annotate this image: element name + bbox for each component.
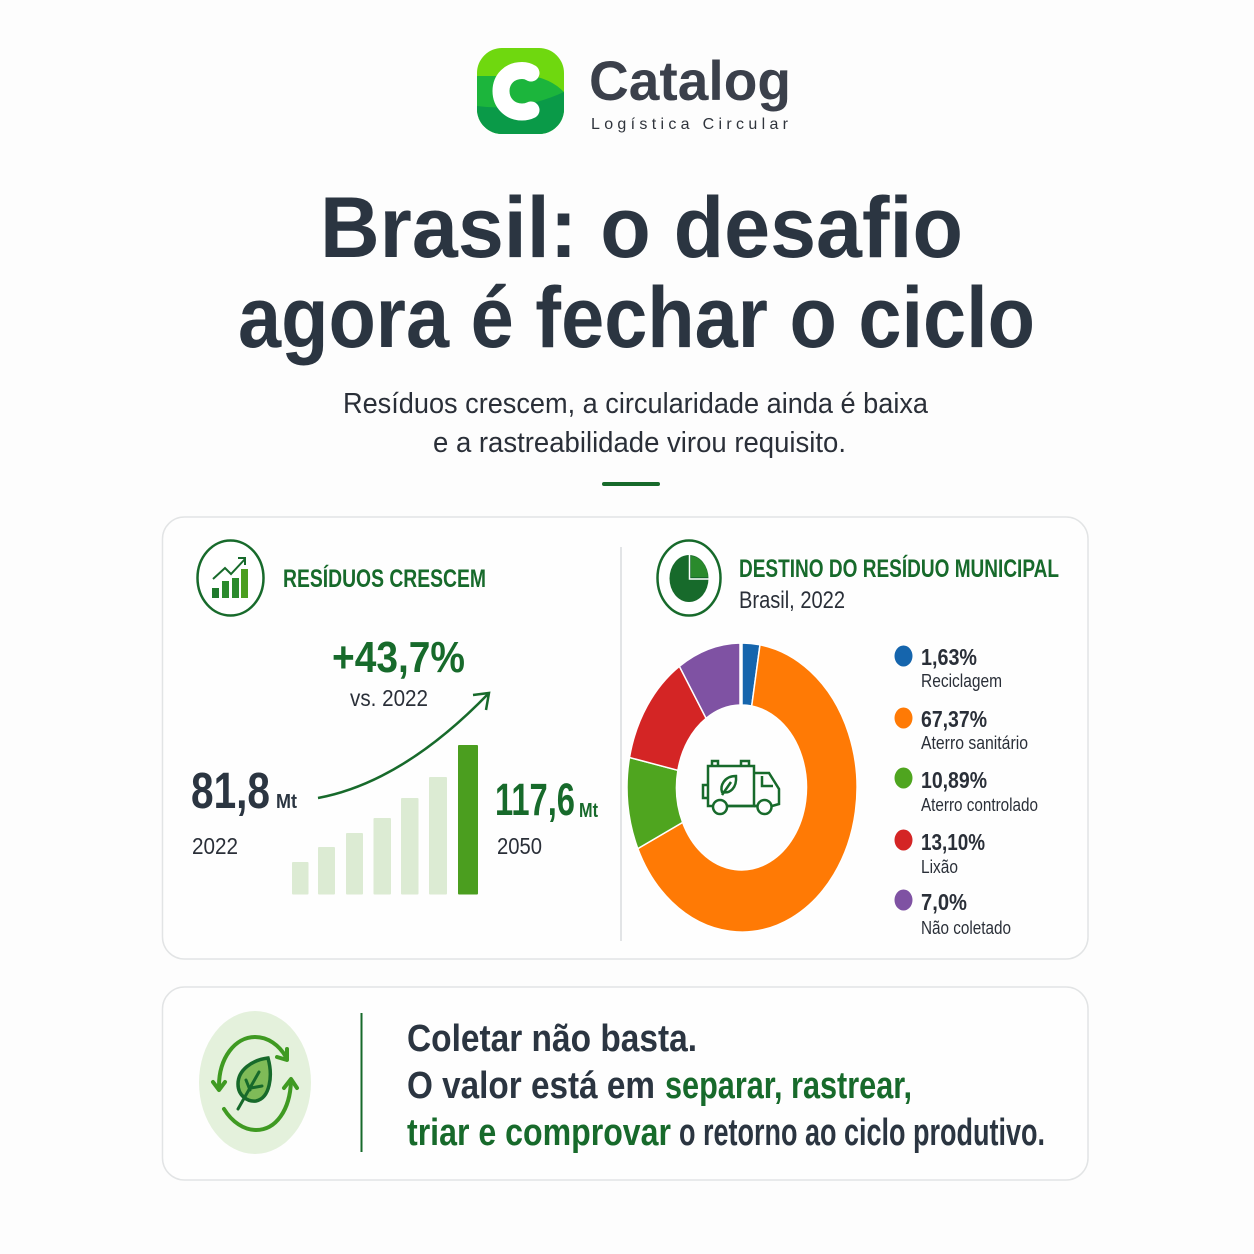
bar chart xyxy=(292,745,478,894)
legend item: nao coletado: 7,0% xyxy=(921,889,967,915)
stat: 2022 value: Mt xyxy=(276,791,297,813)
title xyxy=(238,180,1035,366)
stat: 2050 value: 2050 xyxy=(497,833,542,859)
legend item: lixao xyxy=(894,829,985,877)
conclusion text xyxy=(407,1018,1045,1154)
heading: destino: DESTINO DO RESÍDUO MUNICIPAL xyxy=(739,554,1059,583)
logo wordmark: Catalog xyxy=(589,49,791,112)
heading: destino: Brasil, 2022 xyxy=(739,587,845,614)
legend item: aterro sanitario xyxy=(894,706,1028,753)
legend item: reciclagem: 1,63% xyxy=(921,644,977,670)
title: Brasil: o desafio xyxy=(320,180,963,276)
subtitle: e a rastreabilidade virou requisito. xyxy=(433,427,846,459)
title divider xyxy=(602,482,660,486)
stat: growth percent: +43,7% xyxy=(332,633,465,682)
conclusion text: separar, rastrear, xyxy=(665,1065,912,1107)
logo tagline: Logística Circular xyxy=(591,116,789,133)
legend item: aterro controlado xyxy=(894,767,1038,815)
conclusion text: Coletar não basta. xyxy=(407,1018,697,1060)
legend item: reciclagem xyxy=(894,644,1002,691)
stat: 2050 value: Mt xyxy=(579,800,598,822)
legend item: nao coletado: Não coletado xyxy=(921,918,1011,938)
icon: recycling truck xyxy=(703,761,779,814)
legend item: aterro sanitario: 67,37% xyxy=(921,706,987,732)
legend item: aterro controlado: 10,89% xyxy=(921,767,987,793)
legend item: lixao: Lixão xyxy=(921,857,958,877)
subtitle: Resíduos crescem, a circularidade ainda é baixa xyxy=(343,388,929,420)
legend item: lixao: 13,10% xyxy=(921,829,985,855)
icon: pie chart xyxy=(658,540,720,616)
legend xyxy=(894,644,1038,938)
heading: residuos crescem: RESÍDUOS CRESCEM xyxy=(283,564,486,593)
stat: 2050 value xyxy=(495,774,598,859)
arrow: growth curve xyxy=(318,693,489,798)
stat: 2022 value: 2022 xyxy=(192,833,238,859)
icon: growth chart xyxy=(198,540,264,616)
logo xyxy=(477,48,791,134)
conclusion text: o retorno ao ciclo produtivo. xyxy=(679,1112,1045,1154)
icon: leaf recycling xyxy=(199,1011,311,1154)
logo mark xyxy=(477,48,564,134)
legend item: nao coletado xyxy=(894,889,1011,938)
donut chart xyxy=(627,643,857,932)
stat: 2022 value: 81,8 xyxy=(191,762,270,819)
stat: 2022 value xyxy=(191,762,297,859)
panel: statistics xyxy=(162,517,1088,959)
heading: destino xyxy=(739,554,1059,614)
stat: 2050 value: 117,6 xyxy=(495,774,575,825)
legend item: aterro sanitario: Aterro sanitário xyxy=(921,733,1028,753)
legend item: reciclagem: Reciclagem xyxy=(921,671,1002,691)
subtitle xyxy=(343,388,929,459)
legend item: aterro controlado: Aterro controlado xyxy=(921,795,1038,815)
label: vs 2022: vs. 2022 xyxy=(350,685,428,711)
panel: conclusion xyxy=(162,987,1088,1180)
conclusion text: triar e comprovar xyxy=(407,1112,671,1154)
conclusion text: O valor está em xyxy=(407,1065,655,1107)
title: agora é fechar o ciclo xyxy=(238,270,1035,366)
